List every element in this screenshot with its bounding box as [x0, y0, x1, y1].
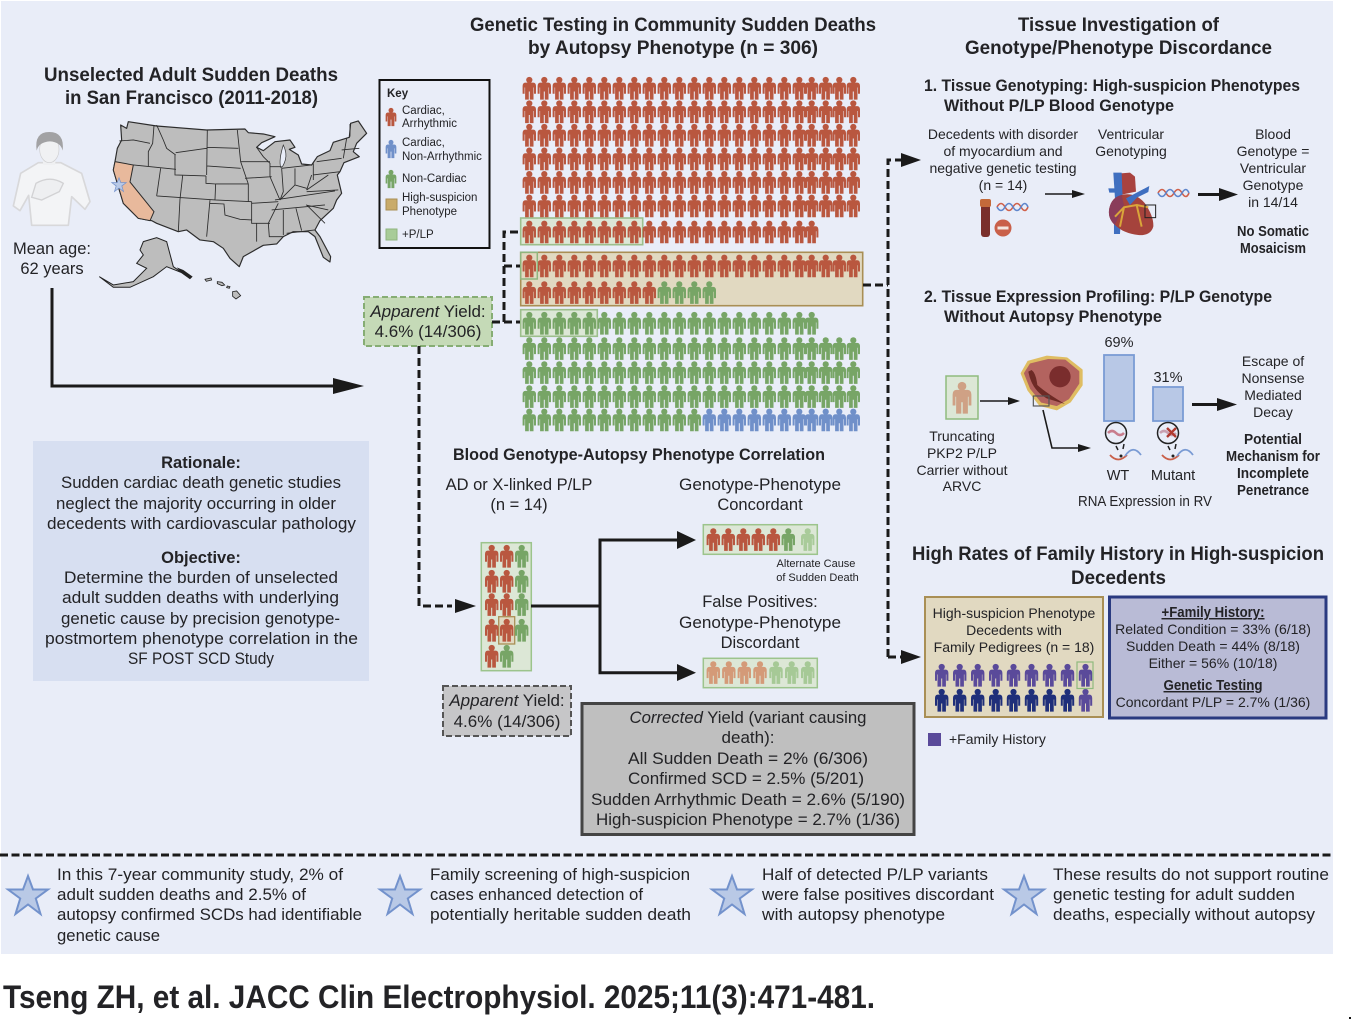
bar chart: RNA expression in RV: WT — [1107, 468, 1129, 484]
text: decedents: (n = 14) — [979, 177, 1027, 193]
text: no somatic mosaicism: Mosaicism — [1240, 241, 1306, 257]
legend item: high-suspicion phenotype: Phenotype — [402, 206, 457, 218]
text: alternate cause: of Sudden Death — [776, 572, 859, 584]
takeaway 4: deaths, especially without autopsy — [1053, 905, 1315, 924]
text: blood genotype equals ventricular genotype: Ventricular — [1240, 160, 1306, 176]
text: false positives: Genotype-Phenotype — [679, 614, 841, 632]
text: truncating carrier: Truncating — [929, 428, 995, 444]
pictogram: family pedigrees: Family Pedigrees (n = 18) — [934, 639, 1094, 655]
text: ventricular genotyping: Genotyping — [1095, 143, 1167, 159]
text: potential mechanism — [1226, 432, 1320, 499]
callout: family history rates: Either = 56% (10/18) — [1149, 655, 1277, 671]
text: objective: postmortem phenotype correlation in the — [45, 630, 358, 648]
subheading: tissue genotyping: 1. Tissue Genotyping: High-suspicion Phenotypes — [924, 77, 1300, 95]
text: concordant: Genotype-Phenotype — [679, 476, 841, 494]
callout: corrected yield — [582, 704, 914, 834]
heading: high rates of family history — [912, 544, 1324, 589]
text: mean age: 62 years — [20, 260, 84, 278]
text: false positives: False Positives: — [702, 593, 818, 611]
highlight: high-suspicion phenotype box — [521, 252, 863, 306]
bar chart: RNA expression in RV: Mutant — [1151, 468, 1195, 484]
takeaway 3: were false positives discordant — [761, 885, 994, 904]
callout: apparent yield grey — [443, 686, 571, 736]
legend item: non-cardiac — [386, 170, 467, 188]
takeaway 1: In this 7-year community study, 2% of — [57, 865, 343, 884]
icon: star — [712, 876, 752, 914]
heading: tissue investigation — [965, 15, 1272, 59]
takeaway 3: with autopsy phenotype — [761, 905, 945, 924]
callout: family history rates: Related Condition = 33% (6/18) — [1115, 621, 1311, 637]
legend: key: Key — [387, 88, 409, 100]
highlight: P/LP box non-cardiac — [521, 310, 597, 336]
text: escape of nonsense mediated decay: Escape of — [1242, 353, 1304, 369]
text: AD or X-linked: (n = 14) — [490, 496, 548, 514]
legend item: high-suspicion phenotype — [386, 192, 477, 218]
pictogram: family pedigrees: Decedents with — [966, 622, 1062, 638]
text: rationale: decedents with cardiovascular pathology — [47, 515, 357, 533]
panel: unselected adult sudden deaths — [13, 65, 367, 394]
subheading: tissue genotyping: Without P/LP Blood Genotype — [944, 97, 1174, 115]
callout: apparent yield grey: Apparent Yield: — [449, 691, 565, 710]
legend item: non-cardiac: Non-Cardiac — [402, 173, 467, 185]
legend item: cardiac arrhythmic — [386, 105, 457, 130]
text: blood genotype equals ventricular genotype: Blood — [1255, 126, 1291, 142]
legend item: cardiac arrhythmic: Arrhythmic — [402, 118, 457, 130]
text: ventricular genotyping: Ventricular — [1098, 126, 1164, 142]
subheading: tissue expression profiling: 2. Tissue Expression Profiling: P/LP Genotype — [924, 288, 1272, 306]
bar chart: RNA expression in RV — [1078, 335, 1212, 510]
arrow: dashed to blood genotype correlation — [419, 346, 476, 613]
text: concordant: Concordant — [717, 496, 803, 514]
highlight: P/LP box cardiac — [521, 218, 643, 245]
text: truncating carrier: Carrier without — [916, 462, 1008, 478]
arrow: split to concordant and discordant — [531, 531, 696, 681]
citation: Tseng ZH, et al. JACC Clin Electrophysiol. 2025;11(3):471-481. — [3, 979, 875, 1015]
panel: tissue investigation — [916, 15, 1320, 510]
legend item: cardiac arrhythmic: Cardiac, — [402, 105, 445, 117]
legend: family history: +Family History — [949, 731, 1046, 747]
icon: person with hands on chest — [13, 132, 90, 225]
takeaway 2: Family screening of high-suspicion — [430, 865, 690, 884]
callout: family history rates — [1110, 597, 1326, 718]
arrow: carrier to tissue — [980, 397, 1020, 405]
heading: unselected adult sudden deaths: Unselected Adult Sudden Deaths — [44, 65, 338, 86]
icon: ventricular DNA — [1158, 190, 1189, 196]
callout: corrected yield: High-suspicion Phenotype = 2.7% (1/36) — [596, 810, 900, 829]
legend item: cardiac non-arrhythmic: Non-Arrhythmic — [402, 151, 482, 163]
text: concordant — [679, 476, 841, 514]
arrow: to blood genotype result — [1198, 188, 1238, 201]
panel: genetic testing pictogram — [470, 15, 876, 431]
bar chart: RNA expression in RV: RNA Expression in RV — [1078, 494, 1212, 510]
icon: WT transcript — [1106, 422, 1141, 460]
legend item: high-suspicion phenotype: High-suspicion — [402, 192, 477, 204]
takeaway 3 — [712, 865, 994, 924]
heading: high rates of family history: High Rates of Family History in High-suspicion — [912, 544, 1324, 565]
callout: apparent yield green: 4.6% (14/306) — [375, 322, 481, 341]
legend: key — [380, 80, 490, 248]
text: escape of nonsense mediated decay: Decay — [1253, 404, 1293, 420]
text: escape of nonsense mediated decay: Mediated — [1244, 387, 1302, 403]
icon: heart tissue section — [1022, 357, 1082, 409]
text: rationale: Rationale: — [161, 454, 241, 472]
panel: rationale and objective — [33, 441, 369, 681]
pictogram: non-cardiac deaths — [523, 281, 860, 431]
text: alternate cause: Alternate Cause — [777, 558, 855, 570]
legend item: cardiac non-arrhythmic: Cardiac, — [402, 137, 445, 149]
text: rationale — [47, 454, 357, 533]
text: objective: Determine the burden of unselected — [64, 569, 338, 587]
text: decedents: Decedents with disorder — [928, 126, 1078, 142]
text: truncating carrier: ARVC — [943, 478, 981, 494]
takeaway 1: adult sudden deaths and 2.5% of — [57, 885, 306, 904]
callout: family history rates: +Family History: — [1162, 605, 1264, 621]
subheading: tissue expression profiling: Without Autopsy Phenotype — [944, 308, 1162, 326]
corner mark — [1349, 1017, 1351, 1019]
heading: correlation: Blood Genotype-Autopsy Phenotype Correlation — [453, 446, 825, 464]
icon: mutant transcript — [1158, 422, 1193, 460]
text: objective: Objective: — [161, 549, 241, 567]
text: decedents: of myocardium and — [943, 143, 1063, 159]
takeaway 2: cases enhanced detection of — [430, 885, 643, 904]
legend item: P/LP: +P/LP — [402, 229, 434, 241]
arrow: to testing — [52, 288, 364, 394]
takeaway 1: genetic cause — [57, 926, 160, 945]
text: mean age: Mean age: — [13, 240, 91, 258]
icon: blood tube with negative DNA — [980, 199, 1028, 237]
callout: corrected yield: death): — [722, 728, 774, 747]
icon: star — [380, 876, 420, 914]
text: objective: adult sudden deaths with underlying — [62, 589, 339, 607]
pictogram: concordant — [703, 525, 817, 554]
text: potential mechanism: Incomplete — [1237, 466, 1309, 482]
text: blood genotype equals ventricular genotype: Genotype — [1243, 177, 1304, 193]
icon: PKP2 carrier — [946, 376, 978, 419]
text: potential mechanism: Potential — [1244, 432, 1302, 448]
pictogram: discordant — [703, 658, 817, 688]
text: no somatic mosaicism: No Somatic — [1237, 224, 1309, 240]
dashed connectors: yield box to pictogram rows — [492, 232, 520, 322]
panel: blood genotype autopsy phenotype correlation — [443, 446, 914, 834]
heading: genetic testing: by Autopsy Phenotype (n = 306) — [528, 38, 818, 59]
callout: corrected yield: Sudden Arrhythmic Death = 2.6% (5/190) — [591, 790, 905, 809]
text: objective — [45, 549, 358, 668]
panel: family history — [912, 544, 1326, 747]
callout: family history rates: Sudden Death = 44% (8/18) — [1126, 638, 1300, 654]
map: United States with California highlighted — [99, 121, 367, 299]
arrow: to ventricular genotyping — [1045, 190, 1085, 198]
text: decedents: negative genetic testing — [929, 160, 1077, 176]
pictogram: 14 P/LP carriers — [481, 543, 531, 671]
text: AD or X-linked: AD or X-linked P/LP — [446, 476, 592, 494]
text: blood genotype equals ventricular genotype: Genotype = — [1237, 143, 1309, 159]
text: false positives — [679, 593, 841, 652]
callout: corrected yield: Confirmed SCD = 2.5% (5/201) — [628, 769, 864, 788]
heading: tissue investigation: Genotype/Phenotype Discordance — [965, 38, 1272, 59]
heading: tissue investigation: Tissue Investigation of — [1018, 15, 1220, 36]
text: potential mechanism: Mechanism for — [1226, 449, 1320, 465]
takeaway 4: These results do not support routine — [1053, 865, 1329, 884]
text: blood genotype equals ventricular genotype: in 14/14 — [1248, 194, 1298, 210]
bar chart: RNA expression in RV: 31% — [1153, 370, 1183, 386]
takeaway 4 — [1004, 865, 1329, 924]
icon: star — [1004, 876, 1044, 914]
icon: San Francisco star — [112, 178, 126, 191]
heading: genetic testing — [470, 15, 876, 59]
text: rationale: Sudden cardiac death genetic studies — [61, 474, 341, 492]
text: escape of nonsense mediated decay: Nonsense — [1241, 370, 1305, 386]
pictogram: family pedigrees — [925, 597, 1103, 717]
callout: apparent yield grey: 4.6% (14/306) — [454, 712, 560, 731]
pictogram: family pedigrees: High-suspicion Phenotype — [933, 605, 1096, 621]
legend item: P/LP — [386, 229, 434, 241]
text: objective: SF POST SCD Study — [128, 650, 275, 668]
arrow: tissue to RNA expression — [1043, 410, 1091, 452]
icon: heart — [1108, 173, 1156, 235]
takeaway 2: potentially heritable sudden death — [430, 905, 691, 924]
text: false positives: Discordant — [721, 634, 800, 652]
takeaway 1 — [8, 865, 362, 945]
pictogram: cardiac non-arrhythmic deaths — [703, 409, 860, 431]
arrow: to escape of NMD — [1192, 398, 1237, 411]
callout: corrected yield: Corrected Yield (variant causing — [630, 708, 866, 727]
heading: unselected adult sudden deaths — [44, 65, 338, 109]
arrow: dashed to tissue investigation — [863, 153, 921, 664]
callout: family history rates: Genetic Testing — [1164, 678, 1262, 694]
text: no somatic mosaicism — [1237, 224, 1309, 257]
subheading: tissue expression profiling — [924, 288, 1272, 326]
divider — [0, 854, 1333, 856]
takeaway 3: Half of detected P/LP variants — [762, 865, 988, 884]
heading: genetic testing: Genetic Testing in Community Sudden Deaths — [470, 15, 876, 36]
highlight: P/LP box high-suspicion — [521, 252, 537, 279]
bar chart: RNA expression in RV: 69% — [1104, 335, 1134, 351]
pictogram: cardiac arrhythmic deaths — [523, 77, 860, 304]
text: truncating carrier: PKP2 P/LP — [927, 445, 997, 461]
text: objective: genetic cause by precision genotype- — [61, 610, 340, 628]
legend item: cardiac non-arrhythmic — [386, 137, 482, 163]
text: rationale: neglect the majority occurring in older — [56, 495, 337, 513]
callout: apparent yield green: Apparent Yield: — [370, 302, 486, 321]
subheading: tissue genotyping — [924, 77, 1300, 115]
callout: corrected yield: All Sudden Death = 2% (6/306) — [628, 749, 868, 768]
icon: star — [8, 876, 48, 914]
text: potential mechanism: Penetrance — [1237, 483, 1309, 499]
takeaway 2 — [380, 865, 691, 924]
callout: apparent yield green — [364, 297, 492, 346]
callout: family history rates: Concordant P/LP = 2.7% (1/36) — [1116, 694, 1310, 710]
takeaway 1: autopsy confirmed SCDs had identifiable — [57, 905, 362, 924]
heading: unselected adult sudden deaths: in San Francisco (2011-2018) — [65, 88, 318, 109]
takeaway 4: genetic testing for adult sudden — [1053, 885, 1295, 904]
heading: high rates of family history: Decedents — [1071, 568, 1166, 589]
